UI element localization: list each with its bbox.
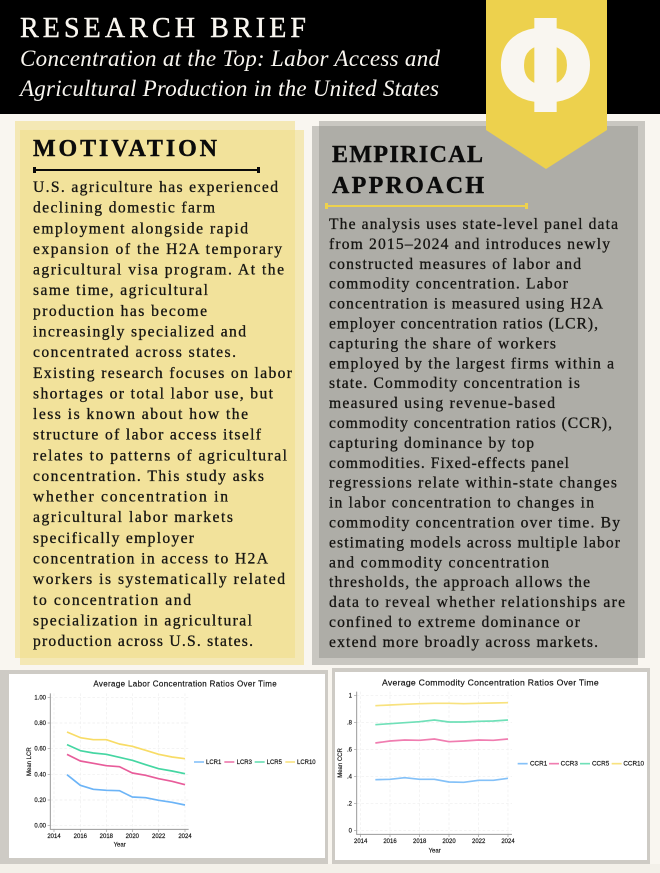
text block: motivation body: concentrated across states. [33,344,236,361]
axis labels: 1 [349,693,353,699]
axis labels: 0.80 [34,721,47,727]
text block: empirical body: in labor concentration to changes in [329,495,594,512]
divider: empirical rule [325,203,528,209]
axis labels: Mean CCR [338,748,344,778]
axis labels: 2018 [100,834,114,840]
chart title: Average Labor Concentration Ratios Over Time [93,680,277,689]
text block: empirical body: data to reveal whether relationships are [329,594,625,611]
text block: motivation body: specialization in agricultural [33,612,253,629]
text block: empirical body: employed by the largest firms within a [329,355,614,372]
text block: motivation body: employment alongside rapid [33,220,248,237]
legend: LCR5 [267,760,283,766]
text block: motivation body: specifically employer [33,530,195,547]
divider: motivation rule [33,167,260,173]
text block: empirical body: measured using revenue-based [329,395,555,412]
line chart: labor concentration ratios [27,680,316,848]
legend: CCR3 [561,761,578,768]
text block: motivation body: production has become [33,303,207,320]
text block: motivation body: whether concentration in [33,489,228,506]
text block: motivation body: agricultural labor markets [33,509,233,526]
axis labels: 2014 [47,834,61,840]
panel: labor concentration chart [0,670,328,864]
text block: empirical body: capturing dominance by top [329,435,534,452]
text block: empirical body: constructed measures of labor and [329,256,581,273]
axis labels [27,696,192,848]
text block: motivation body: U.S. agriculture has experienced [33,179,278,196]
text block: empirical body: regressions relate within-state changes [329,475,617,492]
axis labels: 0 [349,829,353,835]
panel: commodity concentration chart [332,668,650,864]
axis labels: .8 [347,721,353,727]
text block: motivation body: to concentration and [33,592,191,609]
text block: motivation body: workers is systematically related [33,571,285,588]
text block: empirical body: thresholds, the approach allows the [329,574,590,591]
text block: motivation body: concentration. This study asks [33,468,264,485]
axis labels: 2018 [413,839,427,845]
legend: CCR10 [623,761,645,768]
axis labels: 2024 [501,839,515,845]
text block: motivation body: agricultural visa program. At the [33,262,284,279]
axis labels: 2016 [383,839,397,845]
text block: motivation body: less is known about how the [33,406,248,423]
legend [194,760,316,766]
text block: empirical body: commodities. Fixed-effects panel [329,455,570,472]
chart title: Average Commodity Concentration Ratios Over Time [382,677,599,687]
axis labels: .2 [347,802,353,808]
text block: empirical body: extend more broadly across markets. [329,634,598,651]
text block: motivation body: concentration in access to H2A [33,550,269,568]
axis labels: 2016 [74,834,88,840]
text block: empirical body: employer concentration ratios (LCR), [329,316,598,332]
data lines [375,703,508,782]
text block: empirical body: capturing the share of workers [329,335,556,352]
legend [518,761,645,768]
line chart: commodity concentration ratios [338,677,645,854]
axis labels: .6 [347,747,353,753]
legend: LCR3 [237,760,253,766]
icon: phi ribbon [486,0,607,169]
axis labels: Mean LCR [27,747,33,776]
heading: empirical approach: EMPIRICAL [332,142,483,168]
legend: LCR10 [297,760,316,766]
axis labels: 2022 [152,834,166,840]
axis labels [338,693,515,854]
text block: motivation body [33,179,293,650]
data lines [67,732,185,805]
text block: empirical body: The analysis uses state-level panel data [329,216,618,233]
axis labels: 2020 [126,834,140,840]
text block: empirical body: from 2015–2024 and introduces newly [329,236,610,253]
text block: motivation body: production across U.S. states. [33,633,253,650]
text block: motivation body: expansion of the H2A temporary [33,241,282,258]
legend: CCR5 [592,761,610,768]
axis labels: 2020 [442,839,456,845]
text block: motivation body: relates to patterns of agricultural [33,447,288,464]
axis labels: 2014 [354,839,368,845]
axis labels: 0.40 [34,772,47,778]
text block: empirical body: commodity concentration ratios (CCR), [329,415,612,432]
legend: CCR1 [530,761,548,768]
axis labels: Year [429,848,441,854]
axis labels: 0.20 [34,798,47,804]
subtitle [18,46,440,101]
header band [0,0,660,114]
text block: empirical body: estimating models across multiple labor [329,534,621,551]
axis labels: 1.00 [34,696,47,702]
text block: motivation body: structure of labor access itself [33,427,262,444]
text block: empirical body: confined to extreme dominance or [329,614,581,631]
text block: motivation body: Existing research focuses on labor [33,365,293,382]
axis labels: 0.60 [34,747,47,753]
heading: motivation: MOTIVATION [33,136,218,162]
panel: empirical approach [312,121,645,665]
axes and grid [354,692,512,837]
axis labels: 2024 [178,834,192,840]
heading: empirical approach [332,142,484,199]
axis labels: .4 [347,775,353,781]
title: RESEARCH BRIEF [20,13,306,44]
text block: motivation body: shortages or total labor use, but [33,385,274,402]
panel: motivation [15,121,304,665]
text block: motivation body: increasingly specialized and [33,324,246,340]
axis labels: 2022 [472,839,486,845]
subtitle: Concentration at the Top: Labor Access and [20,46,440,71]
text block: empirical body: state. Commodity concentration is [329,375,580,392]
text block: motivation body: same time, agricultural [33,282,209,299]
heading: empirical approach: APPROACH [332,173,484,199]
axes and grid [48,693,189,832]
subtitle: Agricultural Production in the United States [18,76,439,101]
text block: empirical body: concentration is measured using H2A [329,296,604,313]
axis labels: 0.00 [34,824,47,830]
legend: LCR1 [206,760,222,766]
text block: empirical body: commodity concentration over time. By [329,514,620,532]
axis labels: Year [114,842,126,848]
text block: empirical body [329,216,625,651]
text block: empirical body: and commodity concentration [329,554,549,571]
text block: motivation body: declining domestic farm [33,200,215,217]
text block: empirical body: commodity concentration. Labor [329,276,569,293]
